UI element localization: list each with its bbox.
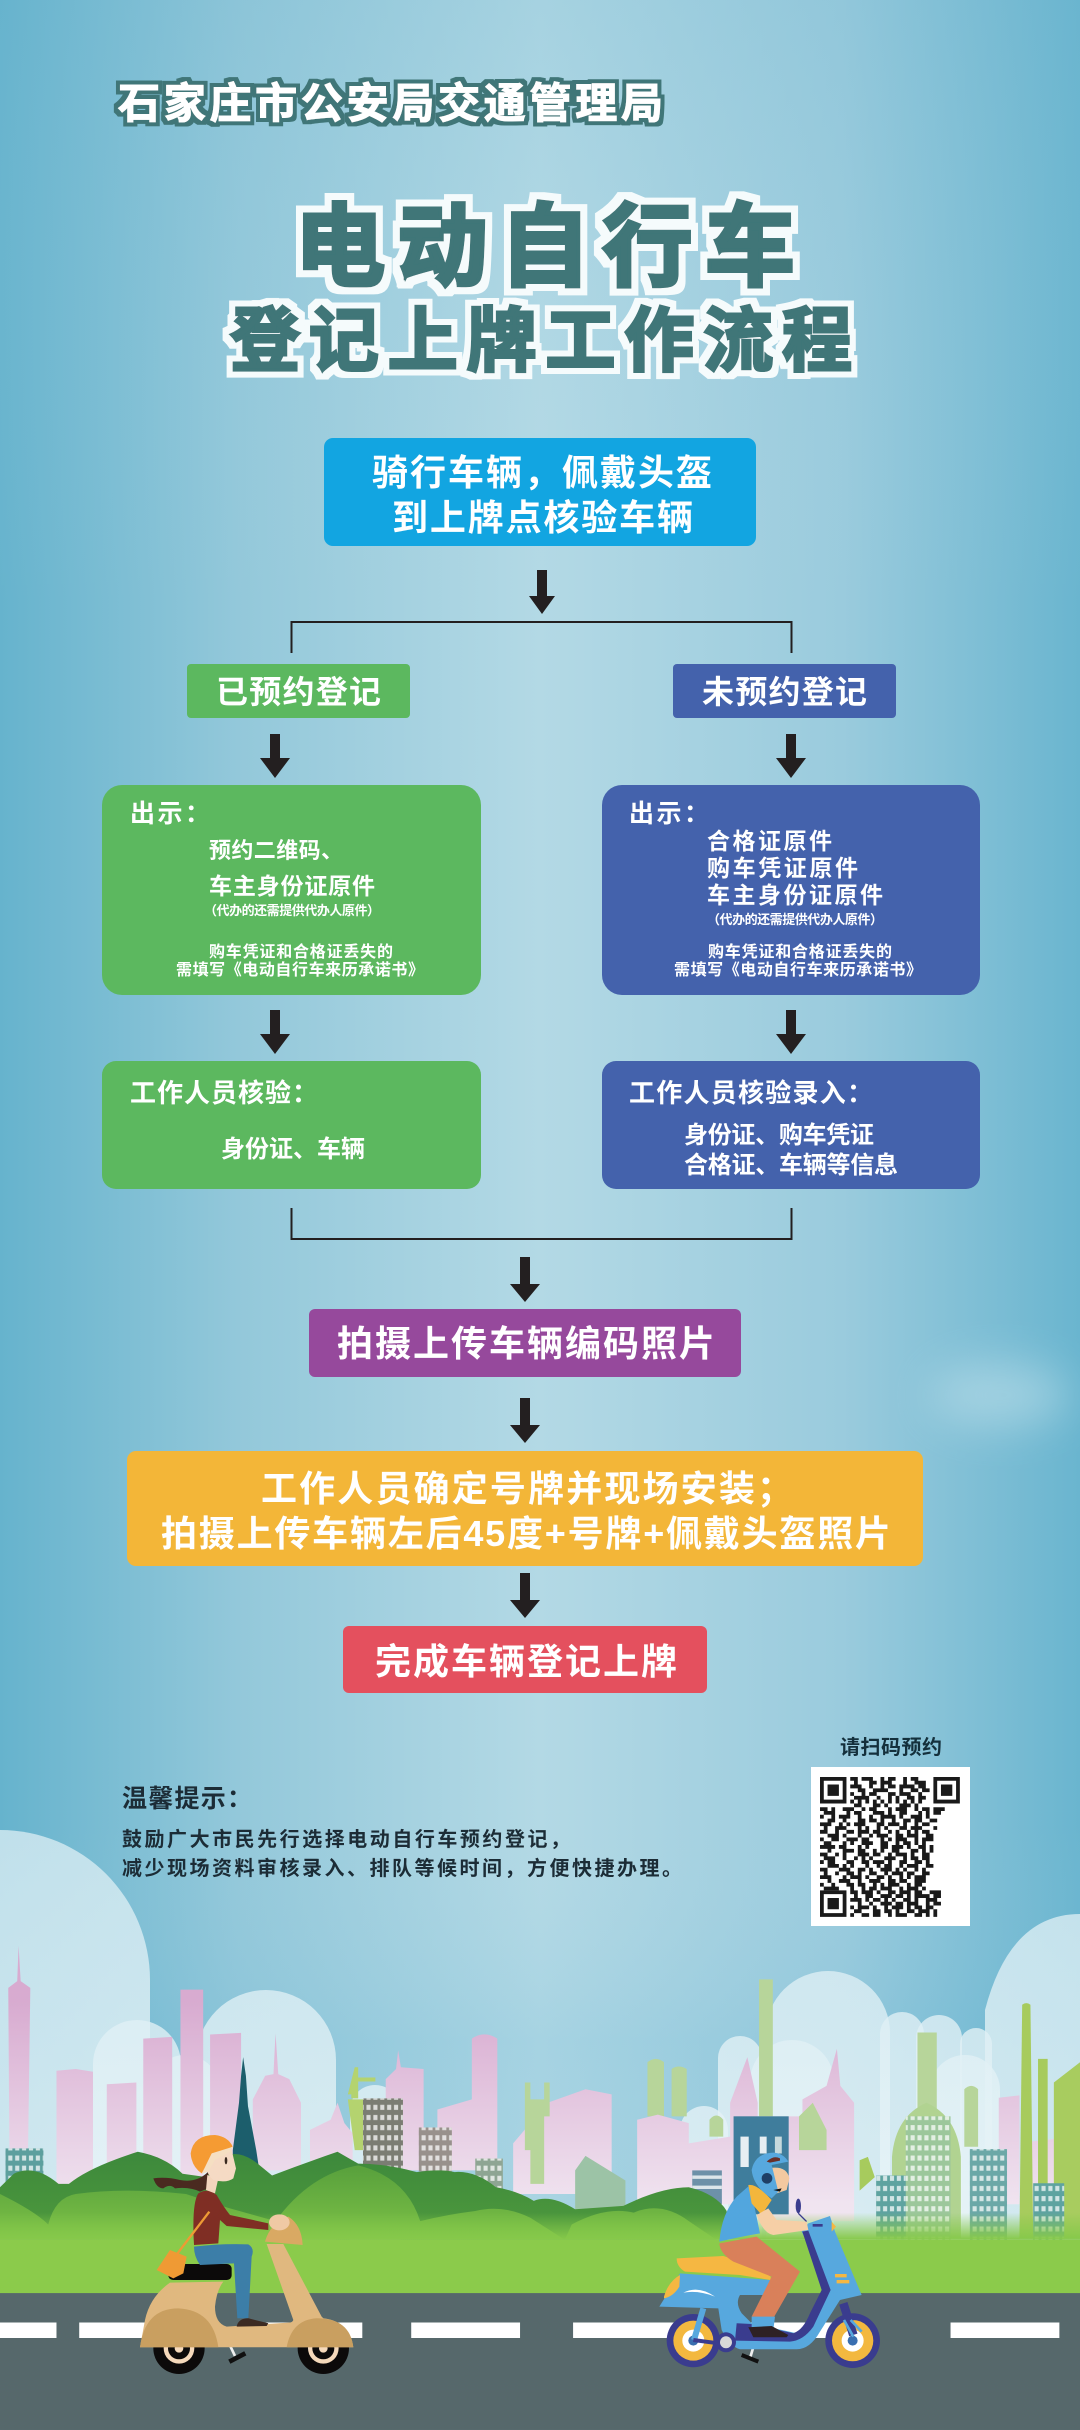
panel: not reserved documents: 合格证原件 [707,828,832,854]
step: install plate [127,1451,923,1566]
clouds [0,1830,1080,2240]
step: ride to registration point: 到上牌点核验车辆 [392,497,693,538]
lane dashes [0,2322,1059,2338]
panel: not reserved documents: （代办的还需提供代办人原件） [707,912,883,927]
kickstand [750,2342,755,2358]
jeans [194,2244,253,2318]
handlebar [265,2217,303,2245]
struts [694,2308,703,2340]
step: ride to registration point: 骑行车辆，佩戴头盔 [372,452,712,493]
hair [153,2172,208,2192]
window buildings [6,2098,1064,2241]
mirror and handle [798,2213,807,2222]
navy frame stripe [735,2231,831,2342]
seat [168,2264,232,2280]
panel: not reserved documents: 需填写《电动自行车来历承诺书》 [674,960,922,979]
step: install plate: 拍摄上传车辆左后45度+号牌+佩戴头盔照片 [161,1513,891,1554]
arrow: right 1 [776,734,806,778]
road [0,2293,1080,2430]
panel: reserved documents: （代办的还需提供代办人原件） [204,903,380,918]
label: reserved [187,664,410,718]
pink buildings [8,1946,1061,2238]
step: finished: 完成车辆登记上牌 [375,1641,677,1682]
title line 2: 登记上牌工作流程 [230,302,852,380]
helmet [752,2153,788,2198]
icon: woman on beige scooter [140,2135,353,2374]
panel: reserved documents: 购车凭证和合格证丢失的 [209,942,393,961]
grass haze [0,2213,1080,2240]
engine [716,2332,736,2352]
organisation name: 石家庄市公安局交通管理局 [118,80,663,127]
QR code [811,1736,970,1926]
trousers [719,2237,800,2318]
icon: man on blue scooter [659,2153,880,2368]
wheels [153,2323,349,2374]
title line 1: 电动自行车 [295,198,795,298]
sleeve [748,2185,772,2215]
step: photo of vehicle code: 拍摄上传车辆编码照片 [337,1323,715,1364]
arrow: to plate step [510,1398,540,1443]
green towers [348,2003,1080,2238]
panel: staff check reserved: 身份证、车辆 [221,1136,365,1163]
arrow: left 1 [260,734,290,778]
arrow: to finish step [510,1573,540,1618]
label: not reserved [673,664,896,718]
body details [664,2275,680,2298]
step: install plate: 工作人员确定号牌并现场安装； [261,1468,793,1509]
panel: staff check reserved: 工作人员核验： [130,1078,318,1108]
bag [175,2212,209,2257]
panel: staff check reserved [102,1061,481,1189]
panel: staff check not reserved: 身份证、购车凭证 [684,1122,874,1149]
dark spire tower [233,2057,260,2177]
arrow: to branch [529,570,555,614]
scooter body [659,2216,862,2349]
step: ride to registration point [324,438,756,546]
grass [0,2240,1080,2294]
scooter body [140,2244,353,2347]
tip block: 减少现场资料审核录入、排队等候时间，方便快捷办理。 [122,1856,682,1880]
arm [757,2208,808,2235]
back trees [0,2152,727,2240]
branch connector top [292,622,792,653]
title [230,198,852,380]
panel: not reserved documents: 出示： [629,800,709,828]
tip block [122,1785,682,1880]
kickstand [227,2340,235,2356]
arrow: right 2 [776,1010,806,1054]
helmet [191,2135,233,2173]
shoe [237,2318,268,2327]
tip block: 鼓励广大市民先行选择电动自行车预约登记， [122,1827,570,1851]
panel: staff check not reserved: 工作人员核验录入： [629,1078,873,1108]
city skyline and grass [0,1946,1080,2430]
torso [719,2185,760,2242]
sock and shoe [752,2317,775,2330]
panel: staff check not reserved [602,1061,980,1189]
panel: reserved documents: 需填写《电动自行车来历承诺书》 [176,960,424,979]
arrow: left 2 [260,1010,290,1054]
panel: reserved documents [102,785,481,995]
front trees [0,2165,716,2240]
torso [193,2191,268,2245]
head [768,2168,789,2195]
neck and face [206,2175,218,2193]
panel: not reserved documents: 购车凭证和合格证丢失的 [708,942,892,961]
step: finished [343,1626,707,1693]
panel: reserved documents: 预约二维码、 [209,838,343,863]
wheels [667,2313,880,2368]
merge connector bottom [292,1208,792,1239]
pale green buildings [647,1979,978,2147]
tip block: 温馨提示： [122,1785,252,1813]
label: not reserved: 未预约登记 [702,674,867,710]
panel: staff check not reserved: 合格证、车辆等信息 [684,1152,898,1179]
label: reserved: 已预约登记 [216,674,381,710]
step: photo of vehicle code [309,1309,741,1377]
panel: not reserved documents: 车主身份证原件 [707,882,883,908]
seat [677,2256,771,2280]
panel: not reserved documents [602,785,980,995]
panel: not reserved documents: 购车凭证原件 [707,855,858,881]
panel: reserved documents: 车主身份证原件 [209,873,375,899]
panel: reserved documents: 出示： [130,800,210,828]
arrow: to photo step [510,1257,540,1302]
QR caption: 请扫码预约 [840,1736,942,1759]
